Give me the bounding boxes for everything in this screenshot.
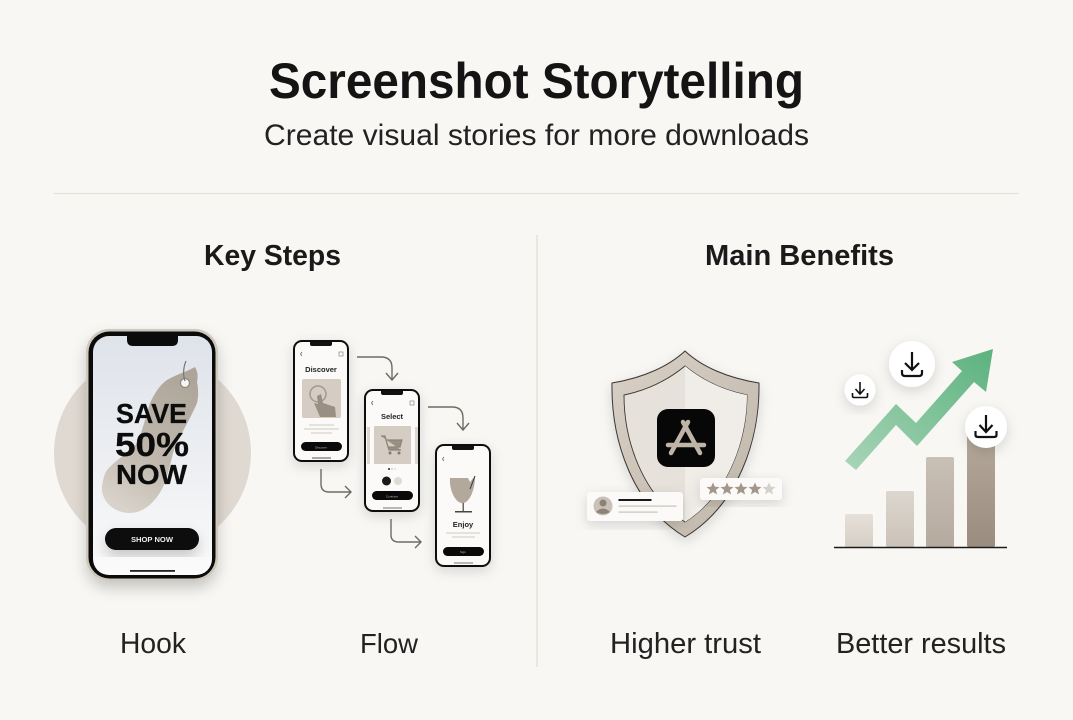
flow illustration	[293, 340, 491, 567]
phone: enjoy	[435, 444, 491, 567]
green arrow	[845, 349, 993, 470]
icon: download small	[844, 374, 876, 406]
title: Screenshot Storytelling	[269, 53, 804, 109]
price tag shape	[102, 367, 198, 513]
label: better results: Better results	[836, 628, 1006, 660]
headline: SAVE	[116, 398, 187, 429]
shield illustration	[587, 351, 782, 537]
icon: download on bar	[965, 406, 1007, 448]
phone: select	[364, 389, 420, 512]
phone: discover	[293, 340, 349, 462]
headline: NOW	[116, 459, 188, 490]
headline: 50%	[115, 426, 189, 463]
phone: select: Continue	[386, 494, 398, 498]
review card	[587, 492, 683, 521]
heading: key steps: Key Steps	[204, 240, 341, 272]
phone: enjoy: Sign	[460, 550, 466, 554]
rating card	[700, 478, 782, 500]
phone: select: Select	[381, 412, 404, 421]
phone: discover: Discover	[315, 446, 327, 450]
icon: download large	[889, 341, 935, 387]
phone: discover: Discover	[305, 365, 337, 374]
app store icon	[657, 409, 715, 467]
hook illustration	[54, 329, 251, 581]
shop now button	[105, 528, 199, 550]
label: higher trust: Higher trust	[610, 628, 761, 660]
phone: enjoy: Enjoy	[453, 520, 474, 529]
growth chart illustration	[834, 341, 1007, 548]
label: hook: Hook	[120, 627, 187, 659]
hook illustration: SHOP NOW	[131, 535, 174, 544]
subtitle: Create visual stories for more downloads	[264, 119, 809, 152]
heading: main benefits: Main Benefits	[705, 240, 894, 272]
arrows	[321, 357, 469, 548]
label: flow: Flow	[360, 628, 418, 659]
